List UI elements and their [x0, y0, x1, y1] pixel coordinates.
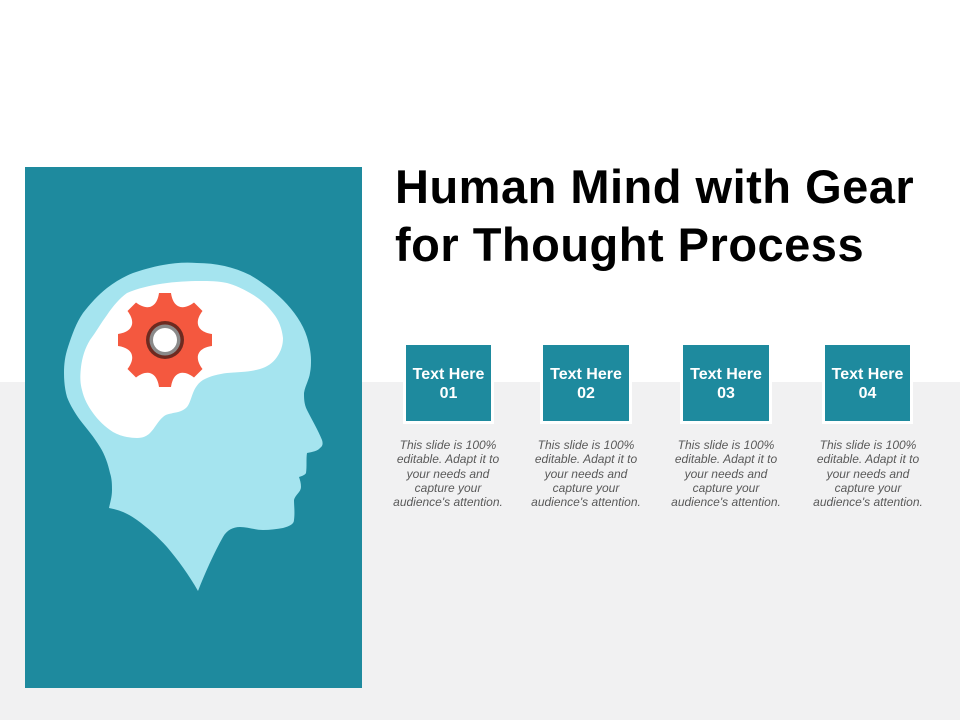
description 02: capture your — [553, 481, 619, 495]
title — [395, 160, 914, 271]
description 03: capture your — [693, 481, 759, 495]
panel: teal portrait background — [25, 167, 362, 688]
column 02 — [531, 345, 641, 509]
description 01: editable. Adapt it to — [397, 452, 499, 466]
description 04: capture your — [835, 481, 901, 495]
description 02: This slide is 100% — [538, 438, 634, 452]
title: for Thought Process — [395, 218, 864, 271]
label box 04 — [822, 342, 913, 424]
description 04: editable. Adapt it to — [817, 452, 919, 466]
column 03 — [671, 345, 781, 509]
description 01 — [393, 438, 503, 509]
label box 03: Text Here — [690, 366, 762, 383]
description 02: audience's attention. — [531, 495, 641, 509]
label box 02 — [540, 342, 632, 424]
description 04: audience's attention. — [813, 495, 923, 509]
description 04: your needs and — [827, 467, 909, 481]
description 02 — [531, 438, 641, 509]
head silhouette — [64, 263, 323, 591]
label box 03 — [680, 342, 772, 424]
label box 04: 04 — [859, 385, 876, 402]
description 01: audience's attention. — [393, 495, 503, 509]
description 03: This slide is 100% — [678, 438, 774, 452]
label box 01: 01 — [440, 385, 457, 402]
label box 03: 03 — [717, 385, 735, 402]
description 04 — [813, 438, 923, 509]
description 03: editable. Adapt it to — [675, 452, 777, 466]
description 01: your needs and — [407, 467, 489, 481]
brain — [80, 281, 283, 438]
icon: gear — [118, 293, 212, 387]
description 02: your needs and — [545, 467, 627, 481]
label box 01 — [403, 342, 494, 424]
description 01: capture your — [415, 481, 481, 495]
description 01: This slide is 100% — [400, 438, 496, 452]
label box 04: Text Here — [832, 366, 903, 383]
label box 01: Text Here — [413, 366, 484, 383]
label box 02: Text Here — [550, 366, 622, 383]
label box 02: 02 — [577, 385, 595, 402]
description 03: your needs and — [685, 467, 767, 481]
column 04 — [813, 345, 923, 509]
description 02: editable. Adapt it to — [535, 452, 637, 466]
description 03 — [671, 438, 781, 509]
description 03: audience's attention. — [671, 495, 781, 509]
description 04: This slide is 100% — [820, 438, 916, 452]
title: Human Mind with Gear — [395, 160, 914, 213]
column 01 — [393, 345, 503, 509]
